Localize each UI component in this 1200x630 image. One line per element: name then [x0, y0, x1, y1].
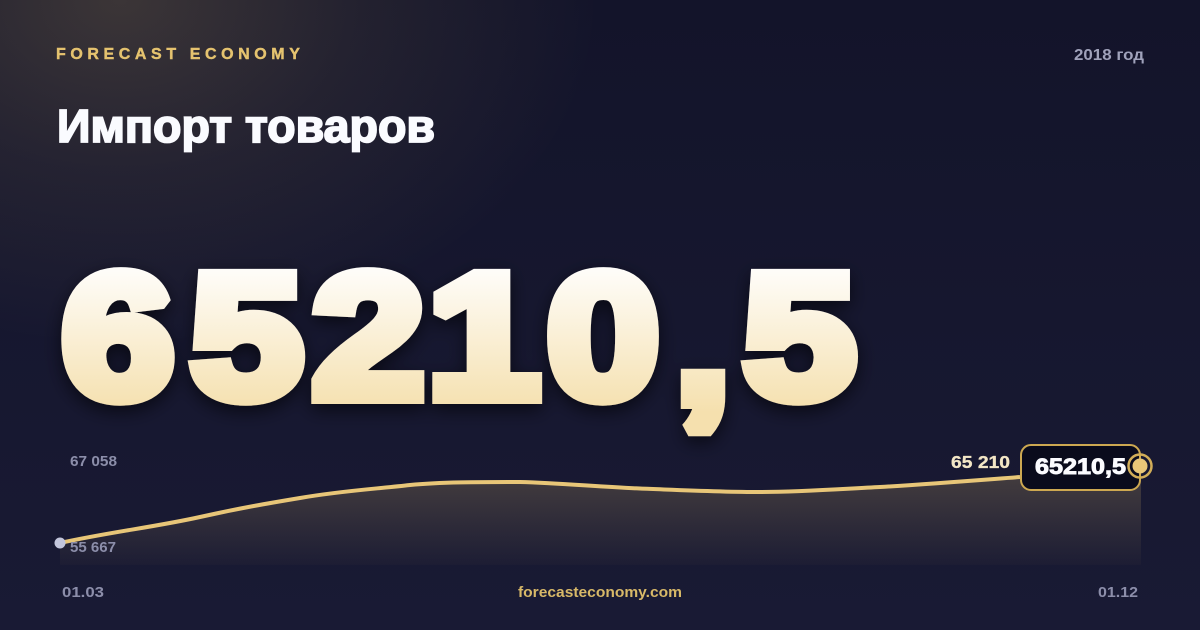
area chart: [54, 470, 1141, 565]
title: Импорт товаров: [57, 100, 435, 152]
line: [60, 477, 1020, 543]
start point: [54, 538, 66, 548]
latest value label: 65 210: [951, 452, 1010, 472]
big value: 65210,5: [62, 239, 856, 440]
brand label: FORECAST ECONOMY: [56, 46, 304, 63]
max label: 67 058: [70, 454, 117, 470]
end date: 01.12: [1098, 585, 1138, 601]
start date: 01.03: [62, 585, 104, 601]
value callout: [1021, 445, 1140, 490]
min label: 55 667: [70, 540, 116, 556]
end marker: [1128, 454, 1152, 478]
area fill: [60, 470, 1141, 565]
value callout: 65210,5: [1035, 454, 1126, 479]
source link: forecasteconomy.com: [518, 585, 682, 601]
year label: 2018 год: [1074, 47, 1144, 64]
